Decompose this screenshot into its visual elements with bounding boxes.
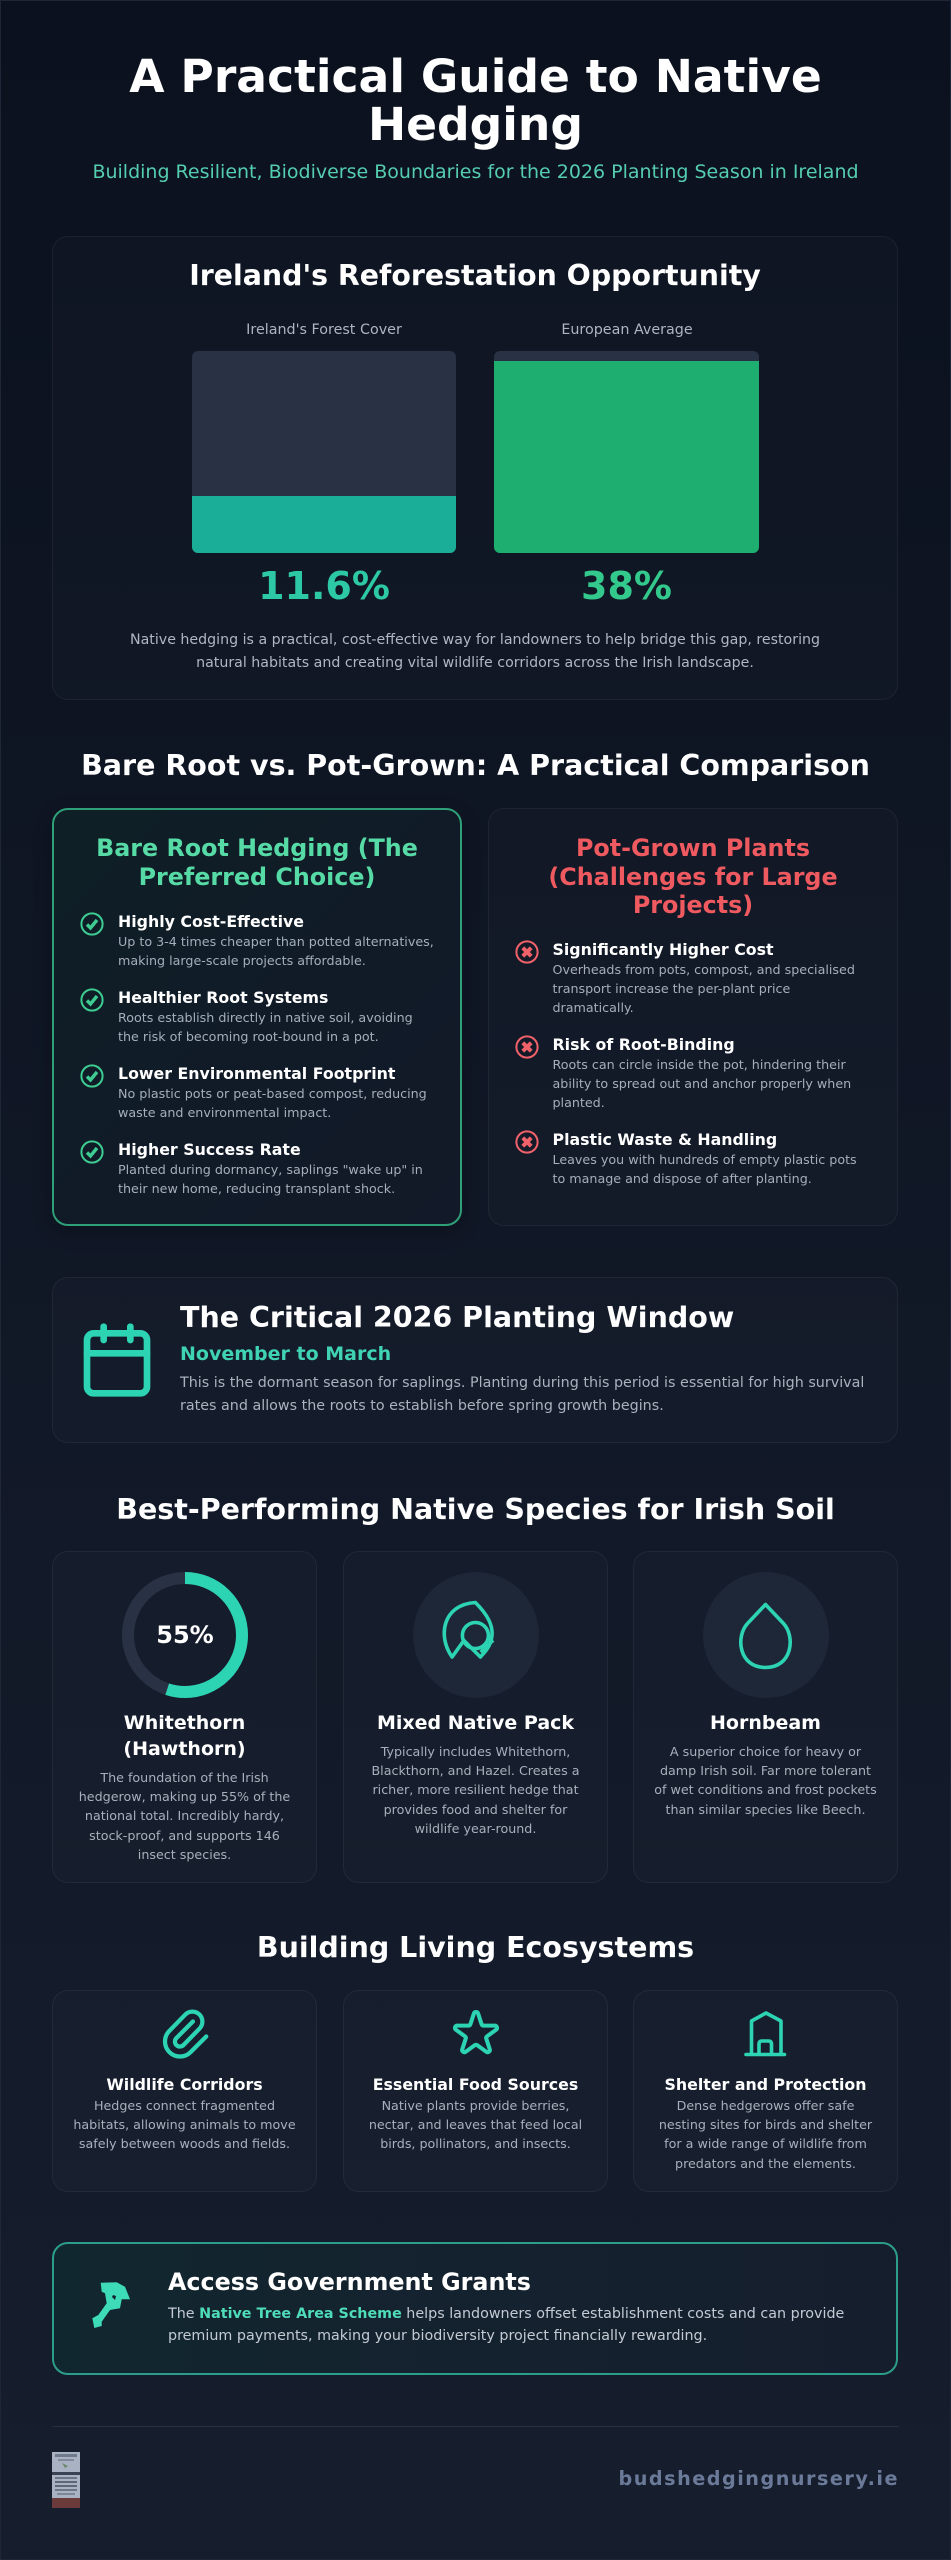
text: root-binding: ability to spread out and anchor properly when (552, 1076, 851, 1091)
text: planting window: This is the dormant season for saplings. Planting during this period is essential for high survival (180, 1375, 864, 1391)
text: shelter: Dense hedgerows offer safe (677, 2098, 854, 2113)
text: native hedging summary (130, 632, 820, 671)
text: root-binding (552, 1035, 851, 1110)
text: shelter (659, 2098, 872, 2171)
text: plastic waste: to manage and dispose of after planting. (552, 1171, 812, 1186)
item: higher cost (515, 940, 855, 1015)
text: root systems: Roots establish directly in native soil, avoiding (118, 1010, 413, 1025)
text: plastic waste (552, 1130, 857, 1186)
text: higher cost: transport increase the per-plant price (552, 981, 790, 996)
text: food sources: Native plants provide berries, (382, 2098, 569, 2113)
label: European average: European Average (561, 322, 693, 338)
text: footprint: Lower Environmental Footprint (118, 1064, 395, 1083)
value: 38%: 38% (581, 564, 672, 608)
text: whitethorn: national total. Incredibly hardy, (85, 1808, 284, 1823)
heading: bare root: Preferred Choice) (139, 863, 375, 891)
text: hornbeam: than similar species like Beech. (665, 1802, 866, 1817)
text: cost-effective (118, 912, 434, 968)
text: wildlife corridors: Hedges connect fragmented (94, 2098, 275, 2113)
icon: cross (515, 1035, 539, 1059)
card: shelter (633, 1990, 898, 2192)
text: footprint: No plastic pots or peat-based compost, reducing (118, 1086, 427, 1101)
heading: grants: Access Government Grants (168, 2268, 531, 2296)
text: root-binding: Risk of Root-Binding (552, 1035, 735, 1054)
card: hornbeam (633, 1551, 898, 1883)
logo: nursery label (52, 2452, 80, 2508)
icon: star (452, 2010, 500, 2054)
heading: pot-grown: Projects) (633, 891, 753, 919)
item: root systems (80, 988, 413, 1044)
icon: check (80, 1064, 104, 1088)
text: shelter: nesting sites for birds and shelter (659, 2117, 872, 2132)
text: root-binding: planted. (552, 1095, 605, 1110)
icon: shelter house (744, 2011, 786, 2056)
panel: reforestation opportunity (52, 236, 898, 700)
text: mixed pack: Typically includes Whitethorn, (381, 1744, 570, 1759)
text: success rate: Higher Success Rate (118, 1140, 301, 1159)
heading: comparison: Bare Root vs. Pot-Grown: A Practical Comparison (81, 749, 870, 782)
footer: website: budshedgingnursery.ie (619, 2467, 899, 2490)
heading: species: Best-Performing Native Species for Irish Soil (116, 1493, 835, 1526)
panel: planting window (52, 1277, 898, 1443)
heading: reforestation: Ireland's Reforestation Opportunity (189, 259, 761, 292)
name: shelter: Shelter and Protection (665, 2075, 866, 2094)
heading: bare root (96, 834, 418, 891)
heading: planting window: The Critical 2026 Planting Window (180, 1301, 734, 1334)
heading: pot-grown: (Challenges for Large (548, 863, 838, 891)
bar: Europe 38% (494, 351, 759, 553)
text: food sources: birds, pollinators, and insects. (380, 2136, 571, 2151)
name: whitethorn: Whitethorn (124, 1712, 245, 1734)
text: planting window (180, 1375, 864, 1414)
icon: calendar (84, 1323, 150, 1397)
text: food sources (369, 2098, 582, 2151)
card: whitethorn (52, 1551, 317, 1883)
panel: pot-grown plants (488, 808, 898, 1226)
panel: government grants (52, 2242, 898, 2375)
text: wildlife corridors: safely between woods and fields. (79, 2136, 290, 2151)
icon: wrench (90, 2280, 134, 2330)
panel: bare root hedging (52, 808, 462, 1226)
text: whitethorn: The foundation of the Irish (100, 1770, 269, 1785)
text: cost-effective: Up to 3-4 times cheaper than potted alternatives, (118, 934, 434, 949)
text: whitethorn: stock-proof, and supports 146 (89, 1828, 280, 1843)
name: food sources: Essential Food Sources (373, 2075, 578, 2094)
heading: bare root: Bare Root Hedging (The (96, 834, 418, 862)
item: plastic waste (515, 1130, 857, 1186)
icon: check (80, 1140, 104, 1164)
text: mixed pack (371, 1744, 580, 1836)
heading: ecosystems: Building Living Ecosystems (257, 1931, 694, 1964)
text: hornbeam (654, 1744, 877, 1817)
text: planting window: rates and allows the roots to establish before spring growth begins. (180, 1398, 664, 1414)
text: higher cost: dramatically. (552, 1000, 634, 1015)
card: mixed native pack (343, 1551, 608, 1883)
text: cost-effective: making large-scale projects affordable. (118, 953, 366, 968)
title: Hedging (368, 98, 583, 151)
text: higher cost: Significantly Higher Cost (552, 940, 774, 959)
text: grants (168, 2303, 844, 2348)
item: success rate (80, 1140, 423, 1196)
value: 11.6%: 11.6% (258, 564, 390, 608)
name: hornbeam: Hornbeam (710, 1712, 821, 1734)
text: whitethorn: hedgerow, making up 55% of the (79, 1789, 290, 1804)
text: success rate: Planted during dormancy, saplings "wake up" in (118, 1162, 423, 1177)
icon: paperclip (162, 2010, 208, 2059)
text: success rate: their new home, reducing transplant shock. (118, 1181, 395, 1196)
text: root-binding: Roots can circle inside the pot, hindering their (552, 1057, 846, 1072)
text: shelter: predators and the elements. (675, 2156, 856, 2171)
name: whitethorn: (Hawthorn) (123, 1738, 246, 1760)
name: whitethorn (123, 1712, 246, 1760)
subtitle: Building Resilient, Biodiverse Boundaries for the 2026 Planting Season in Ireland (92, 161, 859, 183)
text: footprint (118, 1064, 427, 1120)
text: hornbeam: A superior choice for heavy or (670, 1744, 861, 1759)
icon: cross (515, 1130, 539, 1154)
title (129, 50, 822, 151)
donut chart: 55% (122, 1572, 248, 1698)
text: root systems: the risk of becoming root-bound in a pot. (118, 1029, 379, 1044)
text: shelter: for a wide range of wildlife from (664, 2136, 867, 2151)
text: higher cost (552, 940, 855, 1015)
donut chart: 55%: 55% (156, 1621, 214, 1649)
text: plastic waste: Leaves you with hundreds of empty plastic pots (552, 1152, 857, 1167)
item: cost-effective (80, 912, 434, 968)
title: A Practical Guide to Native (129, 50, 822, 103)
text: higher cost: Overheads from pots, compost, and specialised (552, 962, 855, 977)
icon: water drop in circle (703, 1572, 829, 1698)
bar: Ireland 11.6% (192, 351, 456, 553)
text: grants: The Native Tree Area Scheme helps landowners offset establishment costs and can provide (168, 2306, 844, 2322)
text: root systems: Healthier Root Systems (118, 988, 328, 1007)
name: mixed pack: Mixed Native Pack (377, 1712, 574, 1734)
text: hornbeam: of wet conditions and frost pockets (654, 1782, 877, 1797)
item: root-binding (515, 1035, 851, 1110)
text: native hedging summary: natural habitats and creating vital wildlife corridors across the Irish landscape. (196, 655, 754, 671)
text: food sources: nectar, and leaves that feed local (369, 2117, 582, 2132)
text: root systems (118, 988, 413, 1044)
text: grants: premium payments, making your biodiversity project financially rewarding. (168, 2328, 707, 2344)
text: mixed pack: provides food and shelter for (384, 1802, 567, 1817)
card: food sources (343, 1990, 608, 2192)
icon: check (80, 988, 104, 1012)
text: whitethorn (79, 1770, 290, 1862)
text: mixed pack: wildlife year-round. (415, 1821, 536, 1836)
card: wildlife corridors (52, 1990, 317, 2192)
text: mixed pack: Blackthorn, and Hazel. Creates a (371, 1763, 580, 1778)
name: wildlife corridors: Wildlife Corridors (106, 2075, 263, 2094)
heading: pot-grown (548, 834, 838, 919)
text: wildlife corridors (73, 2098, 296, 2151)
item: footprint (80, 1064, 427, 1120)
heading: pot-grown: Pot-Grown Plants (576, 834, 810, 862)
icon: cross (515, 940, 539, 964)
icon: check (80, 912, 104, 936)
label: Ireland forest cover: Ireland's Forest Cover (246, 322, 402, 338)
text: hornbeam: damp Irish soil. Far more tolerant (660, 1763, 871, 1778)
text: whitethorn: insect species. (138, 1847, 231, 1862)
text: mixed pack: richer, more resilient hedge that (372, 1782, 579, 1797)
text: wildlife corridors: habitats, allowing animals to move (73, 2117, 296, 2132)
icon: leaf in circle (413, 1572, 539, 1698)
subheading: months: November to March (180, 1343, 391, 1365)
text: cost-effective: Highly Cost-Effective (118, 912, 304, 931)
text: footprint: waste and environmental impact. (118, 1105, 331, 1120)
text: success rate (118, 1140, 423, 1196)
text: native hedging summary: Native hedging is a practical, cost-effective way for landowners to help bridge this gap, restoring (130, 632, 820, 648)
text: plastic waste: Plastic Waste & Handling (552, 1130, 777, 1149)
